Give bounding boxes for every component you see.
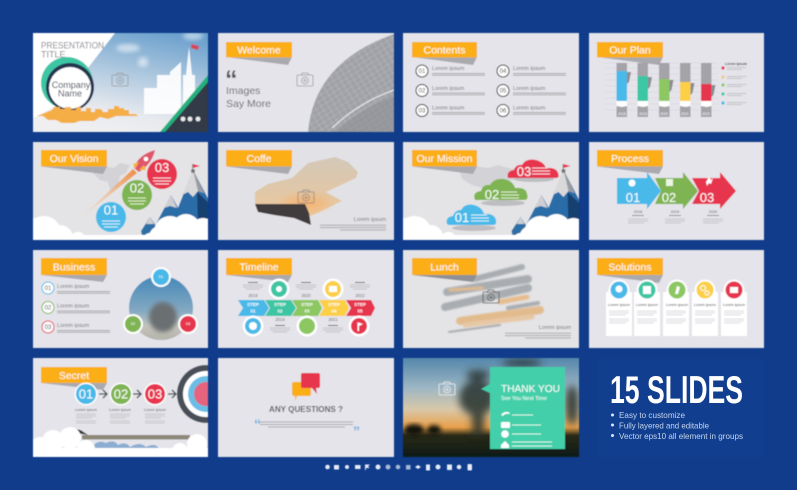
tag: business: Business	[53, 262, 95, 274]
card text: Lorem ipsum	[636, 303, 658, 307]
tag: solutions	[597, 258, 663, 283]
contact card: See You Next Time	[501, 396, 547, 402]
company circle	[41, 57, 94, 111]
feature list	[611, 410, 743, 441]
presentation title: PRESENTATION	[41, 40, 104, 50]
step text: Lorem ipsum	[144, 408, 166, 412]
tag: our mission: Our Mission	[416, 153, 473, 165]
list labels	[57, 284, 110, 332]
legend	[721, 62, 747, 105]
tag: our plan: Our Plan	[609, 44, 651, 56]
cloud 01	[447, 205, 496, 231]
tag: our plan	[597, 42, 663, 65]
steps: 01	[79, 386, 93, 402]
timeline text: 2020	[301, 293, 311, 298]
chevrons: STEP	[274, 302, 286, 307]
step text	[75, 408, 166, 423]
slide: process	[589, 142, 764, 240]
list labels: Lorem ipsum	[432, 106, 465, 112]
arrow 03: 03	[700, 190, 714, 205]
node 02: 02	[131, 321, 136, 326]
chevrons: STEP	[247, 302, 259, 307]
dark corner	[160, 75, 208, 132]
card text	[608, 303, 745, 323]
caption	[505, 325, 571, 338]
caption	[320, 217, 386, 230]
chevrons	[238, 300, 375, 316]
tag: timeline: Timeline	[239, 262, 279, 274]
slide: timeline	[218, 250, 394, 348]
chevrons: 04	[331, 308, 337, 314]
company circle: Name	[58, 88, 82, 98]
tag: business	[41, 258, 107, 282]
timeline text: 2022	[355, 293, 365, 298]
caption: Lorem ipsum	[354, 217, 386, 223]
camera placeholder	[439, 382, 455, 395]
chevrons: STEP	[328, 302, 340, 307]
numbered list: 03	[45, 325, 52, 331]
tag: welcome	[226, 42, 292, 65]
orange skyline	[37, 106, 138, 123]
timeline text: 2019	[275, 317, 285, 322]
brush image	[255, 157, 358, 220]
feature list: Fully layered and editable	[619, 420, 709, 430]
steps	[74, 382, 166, 406]
process captions: 2020	[709, 210, 717, 214]
circles	[608, 280, 744, 300]
contact icons	[501, 412, 510, 448]
numbered list	[42, 282, 54, 333]
caption: Lorem ipsum	[539, 325, 571, 331]
camera placeholder	[483, 290, 499, 303]
arrows	[99, 390, 176, 398]
list labels: Lorem ipsum	[57, 284, 90, 290]
chevrons: STEP	[354, 302, 366, 307]
steps: 02	[114, 386, 128, 402]
mountains	[141, 164, 212, 240]
tag: welcome: Welcome	[237, 44, 281, 56]
slide: our mission	[402, 141, 580, 241]
tag: our vision	[41, 150, 107, 174]
step text: Lorem ipsum	[109, 408, 131, 412]
contact card	[481, 367, 565, 449]
target	[176, 364, 209, 424]
bar chart: 2018	[618, 112, 626, 116]
cloud 01: 01	[455, 210, 469, 225]
numbered list: 01	[45, 286, 52, 292]
card text: Lorem ipsum	[723, 303, 745, 307]
bar chart	[616, 63, 716, 117]
list labels: Lorem ipsum	[513, 86, 546, 92]
arrow 01: 01	[626, 190, 640, 205]
heading: ANY QUESTIONS ?	[269, 404, 343, 414]
steps: 03	[148, 386, 162, 402]
list labels: Lorem ipsum	[57, 304, 90, 310]
circle 01	[96, 202, 126, 232]
caption: Say More	[226, 98, 271, 110]
node 02	[123, 314, 143, 334]
tag: contents: Contents	[423, 44, 466, 56]
slide: presentation title	[33, 32, 208, 132]
cloud 03	[508, 160, 559, 182]
card text: Lorem ipsum	[608, 303, 630, 307]
chevrons: 03	[304, 308, 310, 314]
legend: Lorem Ipsum	[725, 62, 747, 66]
timeline text: 2018	[248, 293, 258, 298]
circle 03: 03	[155, 160, 169, 175]
contact card: THANK YOU	[501, 384, 560, 395]
bar chart: 2020	[660, 112, 668, 116]
chevrons: STEP	[301, 302, 313, 307]
numbered list: 02	[45, 306, 52, 312]
city skyline	[144, 47, 195, 114]
rocket	[133, 150, 155, 172]
quote marks: “	[225, 66, 238, 94]
slide: contents	[403, 33, 579, 132]
dome image	[308, 34, 394, 132]
node 01: 01	[159, 274, 164, 279]
clouds	[30, 427, 208, 459]
node 03: 03	[186, 321, 191, 326]
tag: our vision: Our Vision	[50, 153, 99, 165]
cloud 02: 02	[485, 187, 499, 202]
arrow 02: 02	[662, 190, 676, 205]
dark brush	[255, 204, 311, 225]
list labels: Lorem ipsum	[513, 106, 546, 112]
bird	[72, 430, 88, 435]
caption	[226, 85, 271, 110]
contents list: 04	[500, 69, 507, 75]
cloud 03: 03	[517, 164, 531, 179]
contents list: 06	[500, 109, 507, 115]
blue trees	[94, 440, 158, 448]
process captions	[628, 210, 723, 223]
rocket trail	[86, 168, 138, 213]
arrow 03	[692, 172, 736, 209]
quote text: “	[254, 416, 261, 432]
circle 03	[147, 159, 177, 189]
contents list	[416, 65, 509, 116]
feature list: Vector eps10 all element in groups	[619, 431, 743, 441]
tag: contents	[412, 42, 477, 65]
contents list: 03	[419, 109, 426, 115]
card text: Lorem ipsum	[694, 303, 716, 307]
cards	[606, 292, 747, 336]
tag: lunch	[412, 258, 477, 282]
mountains	[512, 164, 582, 240]
cloud 02	[474, 179, 528, 206]
process captions: 2019	[671, 210, 679, 214]
list labels	[432, 66, 566, 114]
list labels: Lorem ipsum	[57, 323, 90, 329]
chevrons: 05	[357, 308, 363, 314]
chevrons: 02	[277, 308, 283, 314]
slide: lunch	[403, 250, 579, 348]
process captions: 2018	[634, 210, 642, 214]
slide: welcome	[218, 33, 394, 132]
clouds	[32, 213, 209, 241]
contents list: 05	[500, 89, 507, 95]
blurred tree	[459, 359, 579, 436]
tag: lunch: Lunch	[430, 262, 459, 274]
tag: coffe	[226, 150, 292, 174]
tag: process: Process	[611, 153, 649, 165]
contents list: 01	[419, 69, 426, 75]
camera placeholder	[112, 73, 128, 86]
list labels: Lorem ipsum	[432, 86, 465, 92]
icon row	[325, 464, 472, 470]
tag: secret: Secret	[59, 370, 89, 382]
circle 02	[122, 180, 152, 210]
arrow 01	[617, 172, 661, 209]
brush strokes	[445, 267, 540, 332]
company circle: Company	[52, 80, 91, 90]
bar chart: 2022	[702, 112, 710, 116]
world map	[92, 163, 130, 190]
tag: our mission	[412, 150, 477, 174]
panel: 15 slides backing	[598, 359, 764, 457]
card text: Lorem ipsum	[666, 303, 688, 307]
slide: presentation title: TITLE	[41, 50, 66, 60]
world map	[460, 165, 514, 188]
timeline text	[243, 282, 370, 332]
slide: thank you	[403, 358, 579, 457]
slide: business	[33, 250, 208, 348]
bridge	[82, 435, 190, 440]
node 03	[178, 314, 198, 334]
slide: secret	[32, 357, 209, 458]
chevrons: 01	[250, 308, 256, 314]
tag: secret	[41, 367, 107, 390]
tag: timeline	[226, 258, 292, 282]
slide: our plan	[589, 33, 764, 132]
tree silhouettes	[404, 424, 441, 436]
camera placeholder	[298, 190, 314, 203]
bar chart: 2021	[681, 112, 689, 116]
feature list: Easy to customize	[619, 410, 685, 420]
speech bubbles	[292, 373, 320, 401]
caption: Images	[226, 85, 260, 97]
quote text	[254, 416, 360, 439]
list labels: Lorem ipsum	[432, 66, 465, 72]
timeline text: 2021	[328, 317, 338, 322]
circle 01: 01	[104, 202, 118, 218]
tag: process	[597, 150, 663, 174]
camera placeholder	[297, 73, 313, 86]
slide: our vision	[32, 141, 209, 241]
tag: coffe: Coffe	[247, 153, 272, 165]
flag	[191, 44, 199, 50]
contents list: 02	[419, 89, 426, 95]
clouds	[402, 213, 580, 241]
step circles	[242, 278, 370, 336]
slide: any questions	[218, 358, 394, 457]
node 01	[151, 267, 171, 287]
bar chart: 2019	[639, 112, 647, 116]
slide: coffe	[218, 142, 394, 240]
list labels: Lorem ipsum	[513, 66, 546, 72]
arrow 02	[655, 172, 698, 209]
footer icons	[181, 117, 200, 121]
quote text: ”	[353, 423, 360, 439]
tag: solutions: Solutions	[608, 262, 652, 274]
photo circle	[128, 277, 194, 340]
step text: Lorem ipsum	[75, 408, 97, 412]
circle 02: 02	[130, 180, 144, 196]
slide: solutions	[589, 250, 764, 348]
